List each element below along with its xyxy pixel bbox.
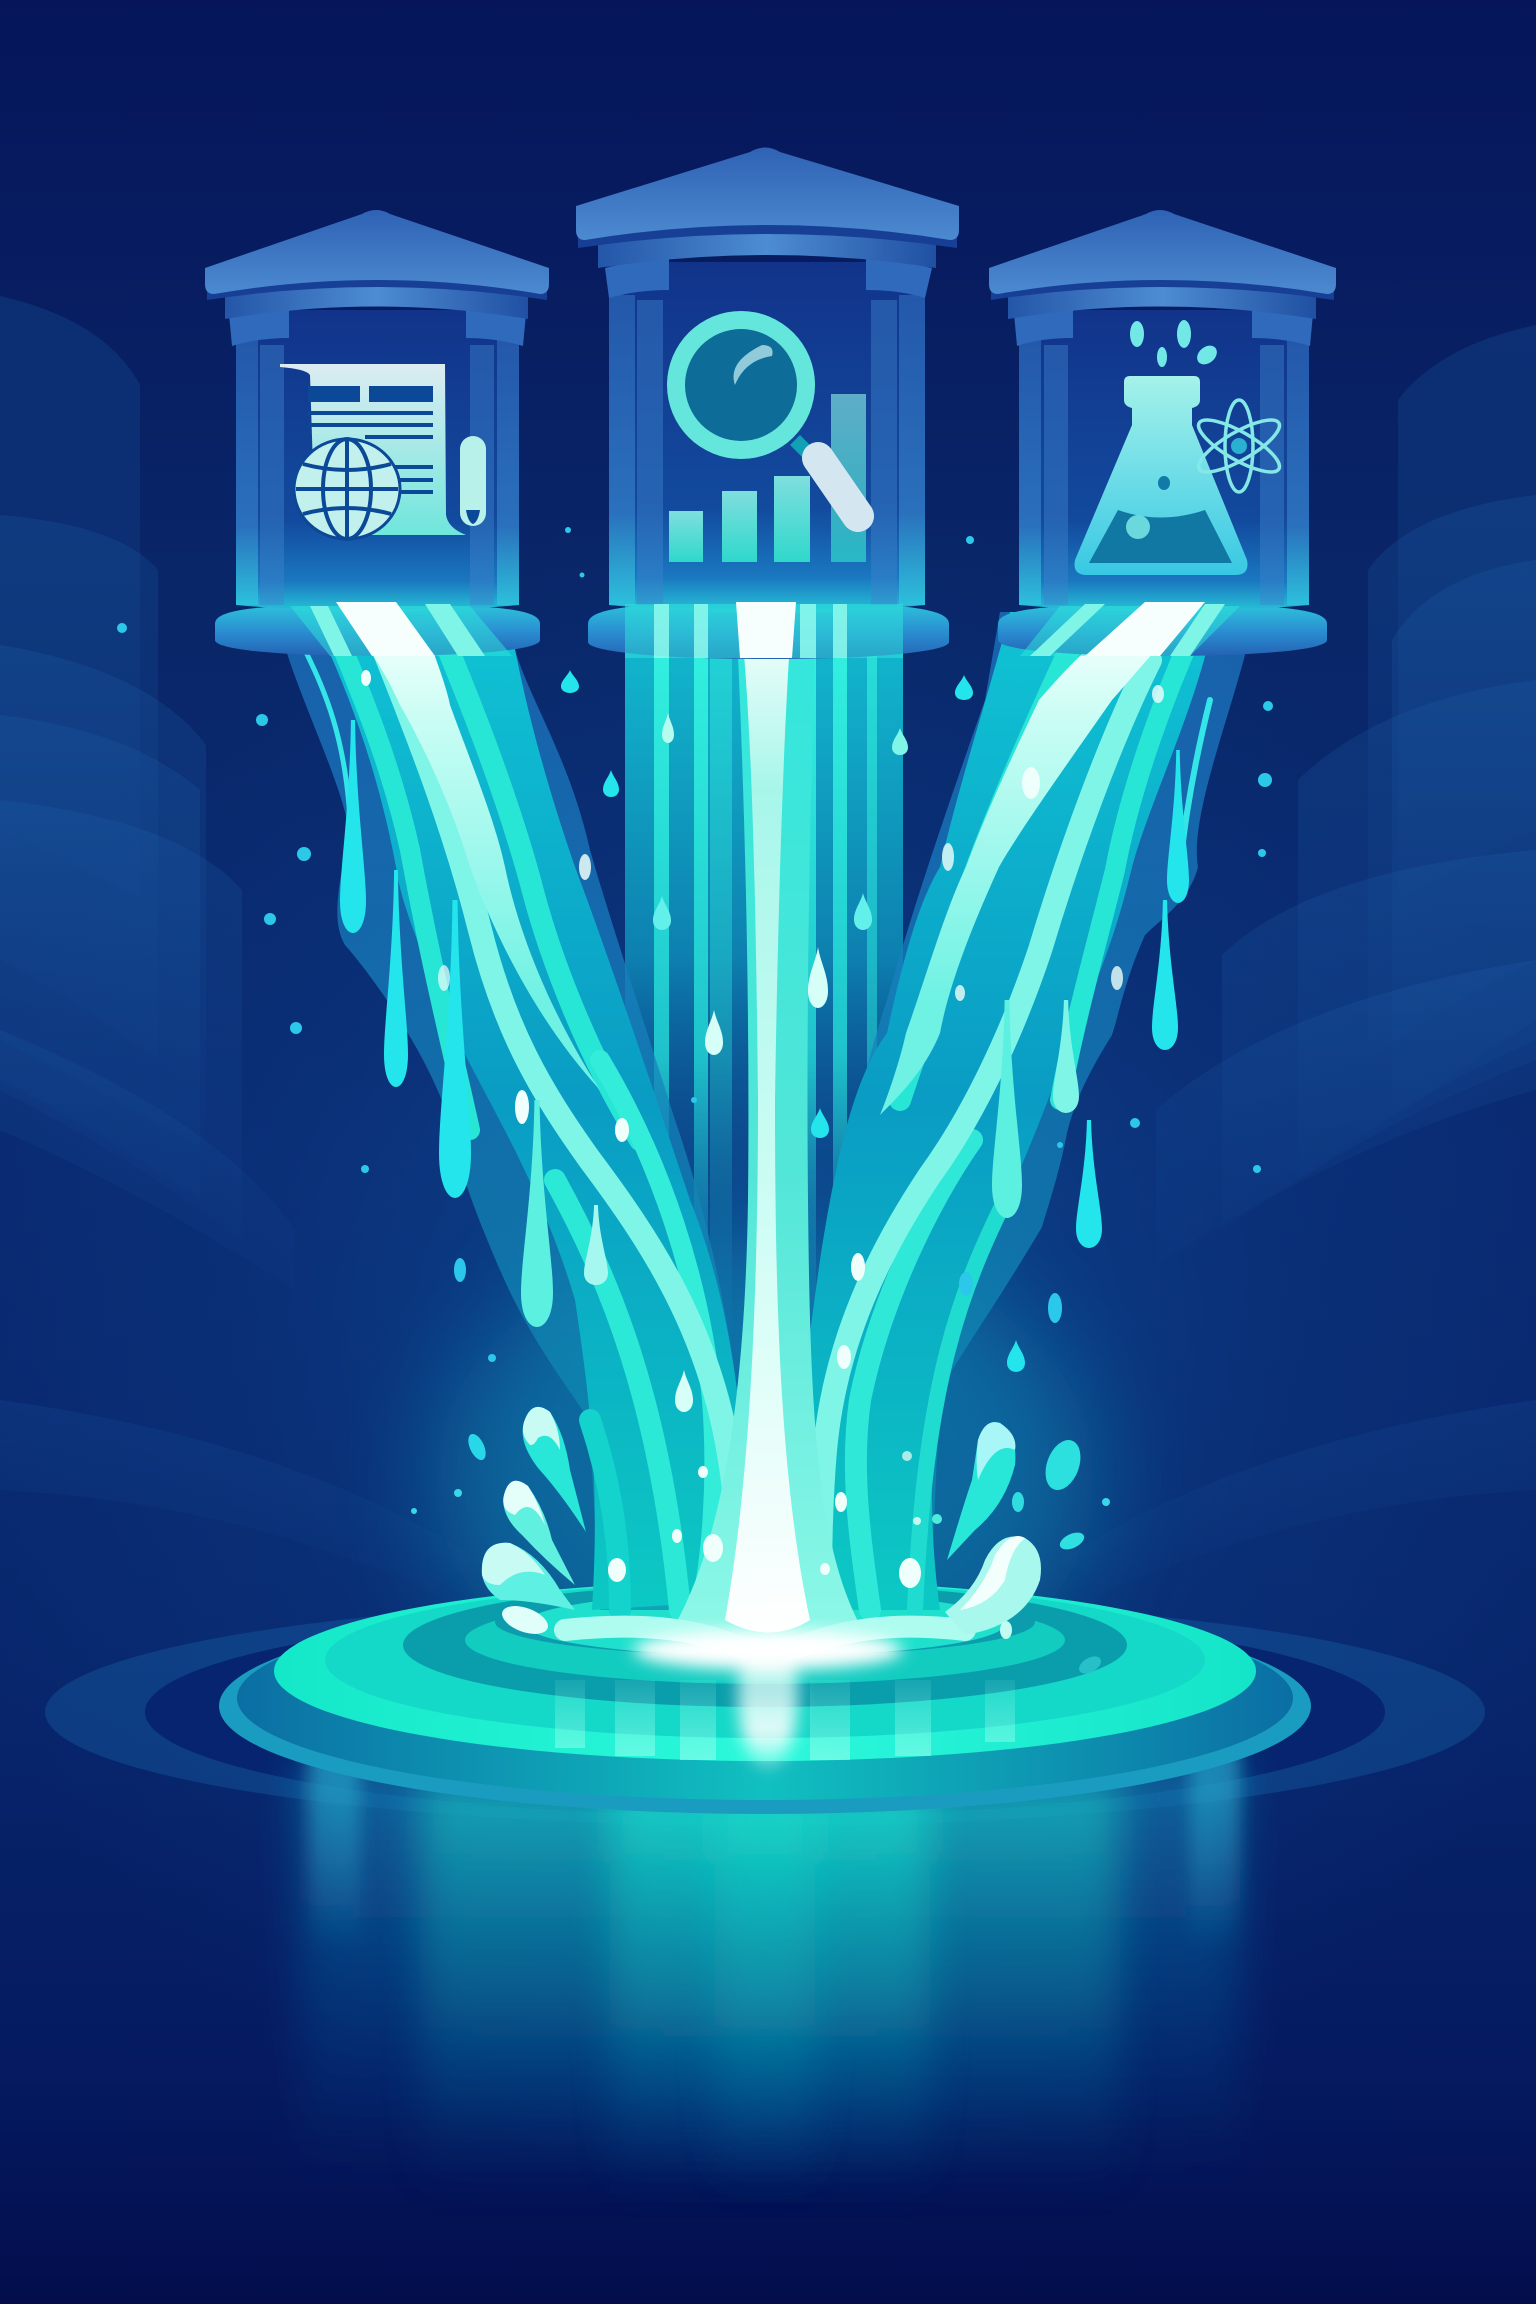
teal mass: [310, 612, 750, 1610]
capitals: [1014, 306, 1073, 346]
roof tier: [225, 284, 528, 319]
column body: [609, 262, 925, 612]
roof underside: [578, 217, 957, 248]
column body: [236, 310, 519, 612]
column body: [1019, 310, 1309, 612]
ripple: vertical light bars: [555, 1680, 1015, 1760]
capitals: [229, 306, 289, 346]
background columns: right: [1060, 325, 1536, 1590]
translucent veil: [283, 612, 750, 1610]
reflection below pool: [300, 1750, 1240, 2240]
splash: left: [411, 1407, 586, 1639]
base ring: [588, 602, 949, 659]
central glow behind water: [435, 1240, 1095, 1720]
left spill: [290, 606, 512, 656]
bright ribbon: [880, 604, 1205, 1115]
long drips: [340, 720, 1189, 1327]
waterfall: left flow: [283, 604, 750, 1610]
centre spill: [625, 604, 903, 658]
right spill: [1020, 606, 1240, 656]
small droplets on flows: [361, 670, 1164, 1588]
bright ribbon: [336, 604, 600, 1090]
background columns: left: [0, 296, 480, 1590]
waterfall: right flow: [794, 604, 1245, 1610]
globe: [294, 439, 400, 539]
roof: [989, 210, 1336, 294]
ripple: bright main disk: [274, 1581, 1256, 1761]
icon: flask spray drops: [1130, 320, 1221, 368]
pool: outer ripples: [45, 1598, 1485, 1826]
pool: concentric ripples: [219, 1581, 1311, 1814]
icon: magnifying glass: [667, 311, 858, 516]
splash: right: [932, 1422, 1110, 1677]
ribbon strands: [325, 606, 714, 1610]
teal mass: [794, 612, 1215, 1610]
thin left strand: [300, 640, 351, 840]
roof: [576, 148, 959, 240]
ribbon strands: [800, 606, 1205, 1610]
roof tier: [598, 229, 936, 268]
pillar: left, news and globe source: [205, 210, 549, 656]
roof underside: [207, 273, 547, 300]
icon: atom: [1192, 400, 1286, 492]
icon: bar chart: [669, 394, 866, 562]
roof tier: [1008, 284, 1316, 319]
icon: document with globe and pen: [280, 364, 486, 539]
thin right strand: [1178, 700, 1210, 900]
water spilling over pillar bases: [290, 602, 1240, 658]
ripple: outer teal rim: [219, 1598, 1311, 1814]
pillar: right, science source: [989, 210, 1336, 656]
pen: [460, 436, 486, 526]
base ring: [998, 604, 1327, 656]
waterfall: centre curtain: [625, 612, 903, 1412]
base ring: [215, 604, 540, 656]
ripple: inner rings: [465, 1596, 1065, 1684]
pillar: centre, search and chart source: [576, 148, 959, 659]
waterfall: base curls: [565, 1627, 965, 1670]
capitals: [605, 258, 669, 298]
translucent veil: [794, 612, 1245, 1610]
waterfall: bright central column: [675, 612, 860, 1642]
roof: [205, 210, 549, 294]
falling drops: [561, 670, 1025, 1412]
ambient particles: [117, 527, 1273, 1362]
icon: flask: [1074, 376, 1248, 575]
roof underside: [991, 273, 1334, 300]
